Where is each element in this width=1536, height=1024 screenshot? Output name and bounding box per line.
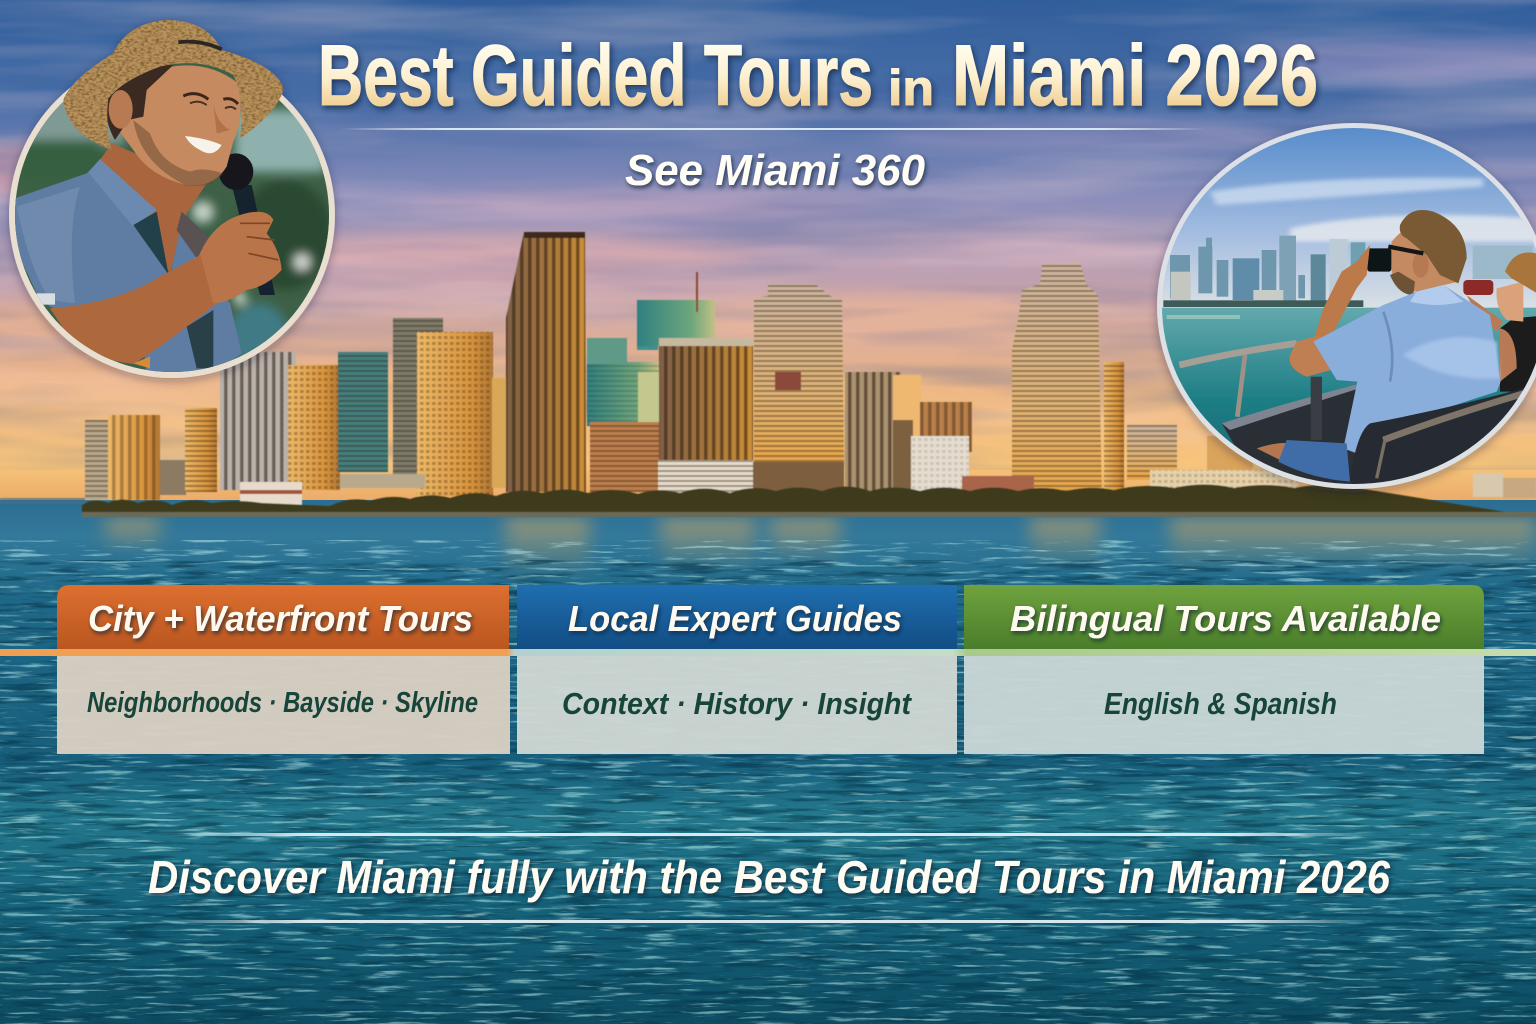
panel: local expert guides: Context · History · Insight — [562, 686, 913, 721]
boat rail — [1179, 343, 1297, 365]
hand — [200, 212, 282, 303]
panel: bilingual tours: English & Spanish — [1104, 686, 1337, 721]
panel: local expert guides — [517, 585, 957, 754]
title divider line — [340, 128, 1206, 130]
sea — [1162, 308, 1536, 446]
head and straw hat overlapping the circle — [63, 20, 283, 186]
man: head — [1391, 232, 1456, 292]
shirt — [10, 160, 242, 373]
city skyline — [0, 232, 1536, 517]
panel: city and waterfront tours: City + Waterfront Tours — [88, 598, 473, 639]
man: shorts and leg — [1256, 443, 1286, 460]
panel: feature columns — [0, 585, 1536, 754]
title: Miami 2026 — [952, 28, 1318, 124]
closing tagline with rules: Discover Miami fully with the Best Guided Tours in Miami 2026 — [148, 851, 1390, 903]
right photo circle: visitors on a boat with binoculars — [1150, 115, 1536, 492]
background: sunset sky — [0, 0, 1536, 505]
companion — [1500, 315, 1536, 392]
man: shirt — [1313, 285, 1501, 453]
subtitle: See Miami 360 — [625, 146, 926, 195]
title: Best Guided Tours — [318, 28, 873, 124]
golden reflections of the skyline — [105, 518, 1536, 578]
seat — [1355, 388, 1524, 484]
microphone — [232, 185, 275, 295]
left photo circle: tour guide with microphone — [0, 20, 340, 390]
closing tagline with rules — [148, 833, 1390, 923]
panel: city and waterfront tours — [57, 585, 510, 754]
distant skyline — [1170, 236, 1533, 302]
title: in — [888, 60, 934, 116]
water background — [0, 500, 1536, 1024]
shoreline trees — [82, 484, 1536, 517]
man: arm — [1313, 245, 1370, 342]
panel: city and waterfront tours: Neighborhoods · Bayside · Skyline — [87, 687, 478, 719]
panel: bilingual tours: Bilingual Tours Available — [1010, 598, 1441, 639]
forearm — [50, 253, 217, 364]
boat hull — [1222, 384, 1363, 488]
panel: local expert guides: Local Expert Guides — [568, 598, 902, 639]
panel: bilingual tours — [964, 585, 1484, 754]
neck — [100, 143, 207, 273]
